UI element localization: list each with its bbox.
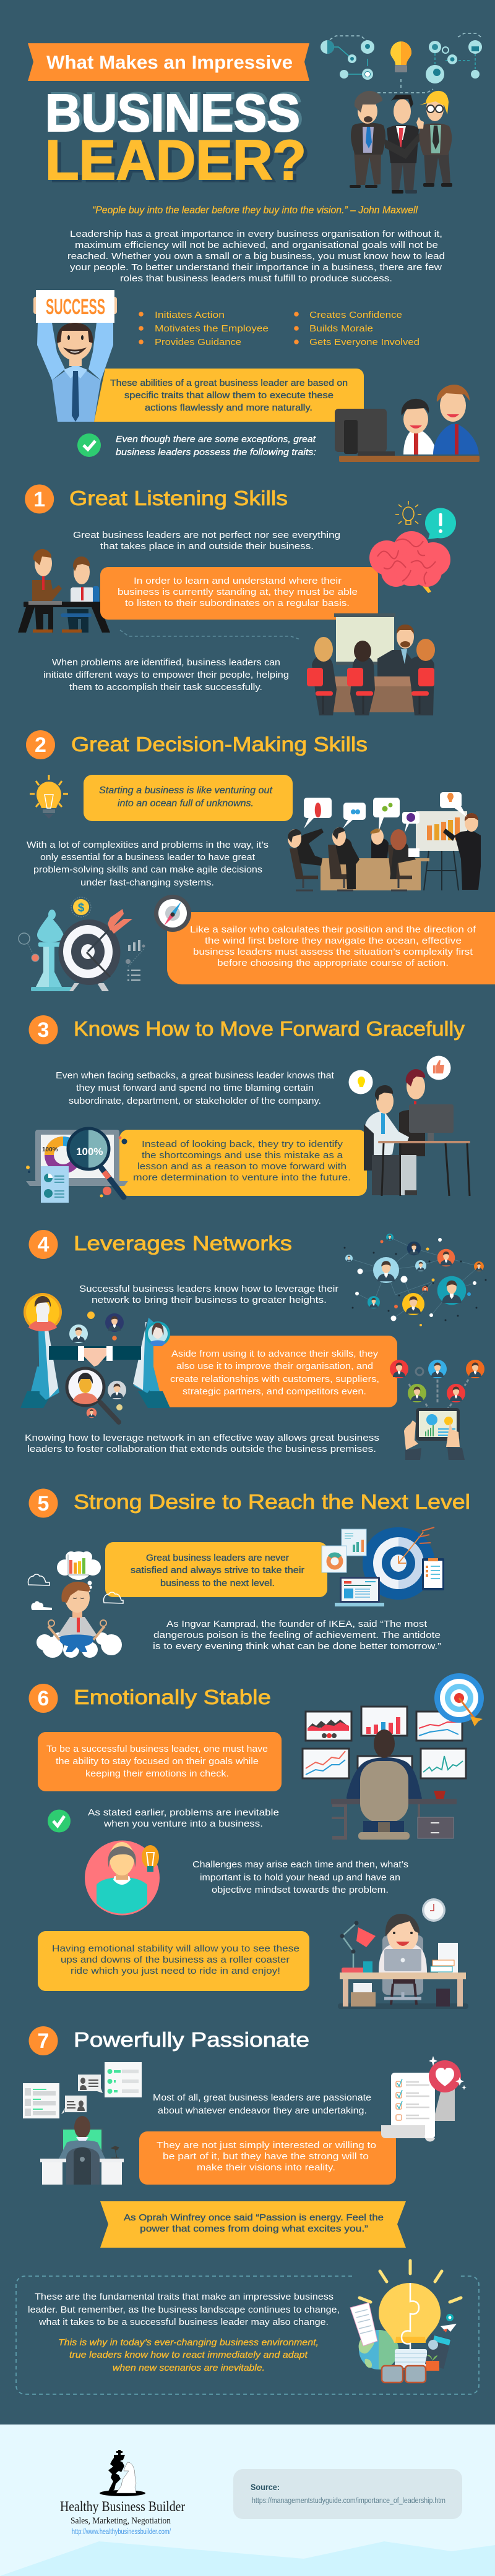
number badge: 1 bbox=[33, 488, 45, 511]
illustration: person at a computer with documents bbox=[23, 2062, 142, 2185]
callout box: also use it to improve their organisation, and bbox=[176, 1361, 373, 1371]
illustration: tablet with contacts bbox=[390, 1360, 484, 1460]
illustration: two men at a table bbox=[18, 549, 110, 633]
conclusion text: leader. But remember, as the business landscape continues to change, bbox=[28, 2305, 340, 2315]
text block: Knowing how to leverage network in an effective way allows great business bbox=[25, 1433, 379, 1443]
logo: chess king and knight bbox=[100, 2450, 145, 2496]
callout box: the ability to stay focused on their goals while bbox=[56, 1756, 259, 1767]
illustration: woman at a desk bbox=[338, 1898, 468, 2009]
text block: As stated earlier, problems are inevitable bbox=[88, 1807, 279, 1818]
decorative dashed connector bbox=[120, 630, 300, 639]
callout box: business is currently standing at, they must be able bbox=[118, 587, 358, 597]
bullet list of leader roles: Motivates the Employee bbox=[155, 323, 269, 334]
callout box bbox=[100, 567, 378, 620]
text block bbox=[192, 1859, 408, 1895]
illustration: people network bbox=[344, 1234, 486, 1326]
headline: business leader bbox=[45, 82, 310, 194]
text block: Most of all, great business leaders are passionate bbox=[153, 2092, 371, 2103]
brand name: Healthy Business Builder bbox=[60, 2499, 185, 2514]
callout box: keeping their emotions in check. bbox=[85, 1768, 229, 1779]
text block: dangerous poison is the feeling of achievement. The antidote bbox=[153, 1630, 441, 1640]
illustration: two colleagues at a desk bbox=[335, 385, 480, 462]
text block bbox=[79, 1284, 338, 1305]
illustration: meditating man on a cloud bbox=[28, 1551, 123, 1658]
illustration: online handshake bbox=[20, 1293, 170, 1422]
website link: http://www.healthybusinessbuilder.com/ bbox=[72, 2528, 171, 2536]
illustration: checklist with heart bbox=[381, 2056, 467, 2142]
section heading: Great Decision-Making Skills bbox=[71, 733, 368, 756]
section 2: great decision-making skills bbox=[19, 730, 495, 991]
illustration: three business leaders bbox=[350, 91, 452, 194]
intro paragraph bbox=[67, 229, 445, 284]
number badge bbox=[26, 730, 55, 759]
number badge bbox=[28, 1684, 58, 1713]
callout box bbox=[105, 1542, 327, 1597]
figure: left man bbox=[350, 91, 385, 188]
text block: problem-solving skills and can make agile decisions bbox=[33, 864, 262, 875]
illustration: man holding success sign: SUCCESS bbox=[46, 295, 105, 319]
callout box: create relationships with customers, suppliers, bbox=[170, 1374, 379, 1384]
illustration: trader with monitors bbox=[303, 1673, 484, 1840]
bullet list of leader roles: Initiates Action bbox=[155, 310, 225, 320]
highlighted conclusion: when new scenarios are inevitable. bbox=[113, 2363, 265, 2373]
intro paragraph: Leadership has a great importance in every business organisation for without it, bbox=[70, 229, 442, 239]
text block: As Ingvar Kamprad, the founder of IKEA, said “The most bbox=[166, 1619, 428, 1629]
tagline: Sales, Marketing, Negotiation bbox=[71, 2516, 171, 2526]
text: traits intro bbox=[116, 434, 316, 458]
text block: Challenges may arise each time and then, what’s bbox=[192, 1859, 408, 1870]
headline: business leader: LEADER? bbox=[45, 129, 306, 192]
ribbon: oprah quote: As Oprah Winfrey once said “Passion is energy. Feel the bbox=[124, 2212, 384, 2223]
icon: green check bbox=[77, 433, 101, 457]
text block: them to accomplish their task successfully. bbox=[69, 682, 262, 693]
callout box: Having emotional stability will allow you to see these bbox=[52, 1943, 299, 1954]
conclusion panel bbox=[16, 2261, 479, 2394]
conclusion text: These are the fundamental traits that make an impressive business bbox=[35, 2292, 334, 2302]
text block: they must forward and spend no time blaming certain bbox=[76, 1083, 314, 1093]
callout box: into an ocean full of unknowns. bbox=[118, 798, 254, 809]
number badge: 4 bbox=[38, 1233, 50, 1256]
number badge: 3 bbox=[38, 1018, 49, 1042]
text block: that takes place in and outside their business. bbox=[100, 541, 314, 552]
text block: about whatever endeavor they are undertaking. bbox=[158, 2105, 367, 2116]
icon: compass bbox=[154, 895, 191, 932]
section 1: great listening skills bbox=[18, 485, 456, 715]
callout box: Instead of looking back, they try to identify bbox=[142, 1139, 343, 1149]
text: traits intro: business leaders possess the following traits: bbox=[116, 447, 316, 458]
callout box: ups and downs of the business as a roller coaster bbox=[61, 1955, 290, 1965]
illustration: meeting around a presentation board bbox=[307, 613, 435, 715]
text block bbox=[153, 1619, 441, 1652]
figure: right man bbox=[416, 91, 452, 187]
section heading: Strong Desire to Reach the Next Level bbox=[74, 1490, 470, 1513]
callout: abilities: actions flawlessly and more naturally. bbox=[145, 403, 312, 413]
number badge: 7 bbox=[38, 2029, 49, 2053]
callout box: Starting a business is like venturing out bbox=[99, 785, 273, 796]
text block: leaders to foster collaboration that extends outside the business premises. bbox=[27, 1444, 376, 1454]
bullet list of leader roles: Provides Guidance bbox=[155, 337, 241, 348]
number badge bbox=[28, 1489, 58, 1517]
intro paragraph: roles that business leaders must fulfill to produce success. bbox=[120, 273, 392, 284]
text block: objective mindset towards the problem. bbox=[212, 1885, 389, 1895]
callout box: the shortcomings and use this mistake as a bbox=[142, 1150, 343, 1161]
source box: https://managementstudyguide.com/importance_of_leadership.htm bbox=[252, 2496, 446, 2505]
section heading: Powerfully Passionate bbox=[74, 2028, 309, 2051]
figure: center man bbox=[385, 95, 422, 194]
number badge bbox=[28, 1015, 58, 1044]
text block: important is to hold your head up and have an bbox=[200, 1872, 400, 1883]
callout box: be part of it, but they have the strong will to bbox=[163, 2151, 369, 2162]
text block: Great business leaders are not perfect nor see everything bbox=[73, 530, 340, 540]
source box: Source: bbox=[251, 2482, 280, 2492]
footer bbox=[0, 2425, 495, 2576]
callout: abilities bbox=[94, 369, 364, 422]
callout box: more determination to venture into the future. bbox=[133, 1172, 351, 1183]
icon: idea network bbox=[321, 33, 483, 93]
callout box: to listen to their subordinates on a regular basis. bbox=[125, 598, 350, 608]
highlighted conclusion: This is why in today’s ever-changing business environment, bbox=[58, 2337, 319, 2348]
icon: brain bbox=[369, 531, 450, 593]
icon: lightbulb outline bbox=[395, 501, 421, 524]
section heading: Leverages Networks bbox=[74, 1232, 292, 1255]
section heading: Emotionally Stable bbox=[74, 1686, 271, 1708]
callout box bbox=[139, 2131, 396, 2185]
conclusion text: what it takes to be a successful business leader may also change. bbox=[38, 2317, 329, 2327]
text block: only essential for a business leader to have great bbox=[40, 852, 256, 863]
decorative footer mountains bbox=[0, 2541, 495, 2576]
ribbon: oprah quote: power that comes from doing what excites you.” bbox=[140, 2224, 368, 2234]
bullet list of leader roles bbox=[139, 310, 420, 348]
illustration: laptop and magnifying glass bbox=[26, 1128, 128, 1203]
illustration: man with idea bbox=[85, 1840, 160, 1916]
callout box: make their visions into reality. bbox=[197, 2162, 335, 2173]
title banner bbox=[28, 43, 309, 81]
text block bbox=[56, 1070, 335, 1106]
number badge: 6 bbox=[38, 1687, 49, 1710]
callout box: before choosing the appropriate course of action. bbox=[217, 958, 449, 968]
speech bubbles bbox=[304, 792, 467, 833]
callout box bbox=[167, 912, 495, 984]
text block bbox=[73, 530, 340, 552]
number badge bbox=[28, 1230, 58, 1259]
section 6: emotionally stable bbox=[28, 1673, 484, 2009]
intro paragraph: reached. Whether you own a small or a big business, you must know how to lead bbox=[67, 251, 445, 262]
highlighted conclusion bbox=[58, 2337, 319, 2373]
headline: business leader: LEADER? bbox=[49, 132, 310, 194]
callout box: Aside from using it to advance their skills, they bbox=[171, 1349, 379, 1359]
section heading: Knows How to Move Forward Gracefully bbox=[74, 1017, 465, 1040]
callout box: business to the next level. bbox=[160, 1578, 275, 1589]
text: traits intro: Even though there are some exceptions, great bbox=[116, 434, 316, 445]
bullet list of leader roles: Gets Everyone Involved bbox=[309, 337, 420, 348]
icon: lightbulb bbox=[30, 775, 68, 819]
intro paragraph: maximum efficiency will not be achieved, and organisational goals will not be bbox=[75, 240, 438, 250]
number badge bbox=[25, 485, 54, 513]
callout box: To be a successful business leader, one must have bbox=[46, 1744, 268, 1754]
text block: initiate different ways to empower their people, helping bbox=[43, 670, 289, 680]
ribbon: oprah quote bbox=[100, 2201, 406, 2248]
illustration: laptop and magnifying glass: 100% bbox=[76, 1146, 103, 1158]
callout: abilities: specific traits that allow them to execute these bbox=[124, 390, 334, 401]
callout box bbox=[38, 1931, 309, 1991]
section 4: leverages networks bbox=[20, 1230, 486, 1460]
source box bbox=[233, 2469, 462, 2519]
conclusion text bbox=[28, 2292, 340, 2327]
bullet list of leader roles: Creates Confidence bbox=[309, 310, 402, 320]
illustration: puzzle lightbulb bbox=[350, 2261, 461, 2382]
illustration: chess piece and target bbox=[19, 897, 145, 991]
icon: speech bubble bbox=[425, 508, 456, 539]
text block: network to bring their business to greater heights. bbox=[92, 1295, 327, 1305]
title banner: What Makes an Impressive bbox=[46, 51, 293, 73]
callout box bbox=[84, 775, 293, 821]
bullet list of leader roles: Builds Morale bbox=[309, 323, 373, 334]
callout box bbox=[38, 1732, 282, 1791]
callout box: satisfied and always strive to take their bbox=[131, 1565, 304, 1576]
section 5: strong desire to reach the next level bbox=[28, 1489, 470, 1658]
callout box: ride which you just need to ride in and enjoy! bbox=[71, 1966, 280, 1976]
text block: When problems are identified, business leaders can bbox=[52, 657, 280, 668]
text block bbox=[25, 1433, 379, 1454]
callout box: lesson and as a reason to move forward with bbox=[137, 1161, 346, 1172]
text block bbox=[43, 657, 289, 693]
text block bbox=[27, 840, 269, 888]
number badge bbox=[28, 2026, 58, 2055]
number badge: 5 bbox=[38, 1492, 49, 1516]
text block: under fast-changing systems. bbox=[80, 877, 214, 888]
illustration: chess piece and target: $ bbox=[78, 902, 85, 915]
text block: With a lot of complexities and problems in the way, it’s bbox=[27, 840, 269, 850]
callout box: In order to learn and understand where their bbox=[134, 576, 342, 586]
illustration: man holding success sign bbox=[33, 290, 117, 422]
illustration: boardroom meeting bbox=[288, 792, 481, 890]
icon: green check bbox=[48, 1809, 71, 1833]
callout box: Great business leaders are never bbox=[146, 1553, 289, 1563]
highlighted conclusion: true leaders know how to react immediately and adapt bbox=[69, 2350, 308, 2360]
illustration: laptop and magnifying glass: 100% bbox=[42, 1146, 58, 1153]
callout box bbox=[152, 1336, 397, 1407]
illustration: two men at a computer bbox=[349, 1056, 470, 1196]
text block bbox=[153, 2092, 371, 2116]
callout box: business leaders must assess the situation’s complexity first bbox=[193, 947, 473, 957]
callout box: the wind first before they navigate the ocean, effective bbox=[205, 936, 462, 946]
intro paragraph: your people. To better understand their importance in a business, there are few bbox=[70, 262, 442, 273]
section 7: powerfully passionate bbox=[23, 2026, 467, 2248]
section heading: Great Listening Skills bbox=[69, 487, 288, 510]
number badge: 2 bbox=[35, 733, 46, 757]
headline: business leader: BUSINESS bbox=[45, 84, 300, 143]
section 3: knows how to move forward gracefully bbox=[26, 1015, 470, 1203]
headline: business leader: BUSINESS bbox=[48, 82, 303, 141]
text block: subordinate, department, or stakeholder of the company. bbox=[69, 1096, 321, 1106]
illustration: target and reports bbox=[322, 1527, 444, 1606]
callout: abilities: These abilities of a great business leader are based on bbox=[110, 378, 348, 388]
callout box: They are not just simply interested or willing to bbox=[157, 2140, 376, 2151]
text block: when you venture into a business. bbox=[103, 1819, 263, 1829]
quote: “People buy into the leader before they buy into the vision.” – John Maxwell bbox=[92, 204, 418, 216]
text block: Even when facing setbacks, a great business leader knows that bbox=[56, 1070, 335, 1081]
callout box: strategic partners, and competitors even. bbox=[183, 1386, 366, 1397]
text block bbox=[88, 1807, 279, 1829]
text block: Successful business leaders know how to leverage their bbox=[79, 1284, 338, 1294]
callout box: Like a sailor who calculates their position and the direction of bbox=[190, 924, 476, 935]
text block: is to every evening think what can be done better tomorrow.” bbox=[153, 1641, 441, 1652]
callout box bbox=[119, 1130, 367, 1196]
